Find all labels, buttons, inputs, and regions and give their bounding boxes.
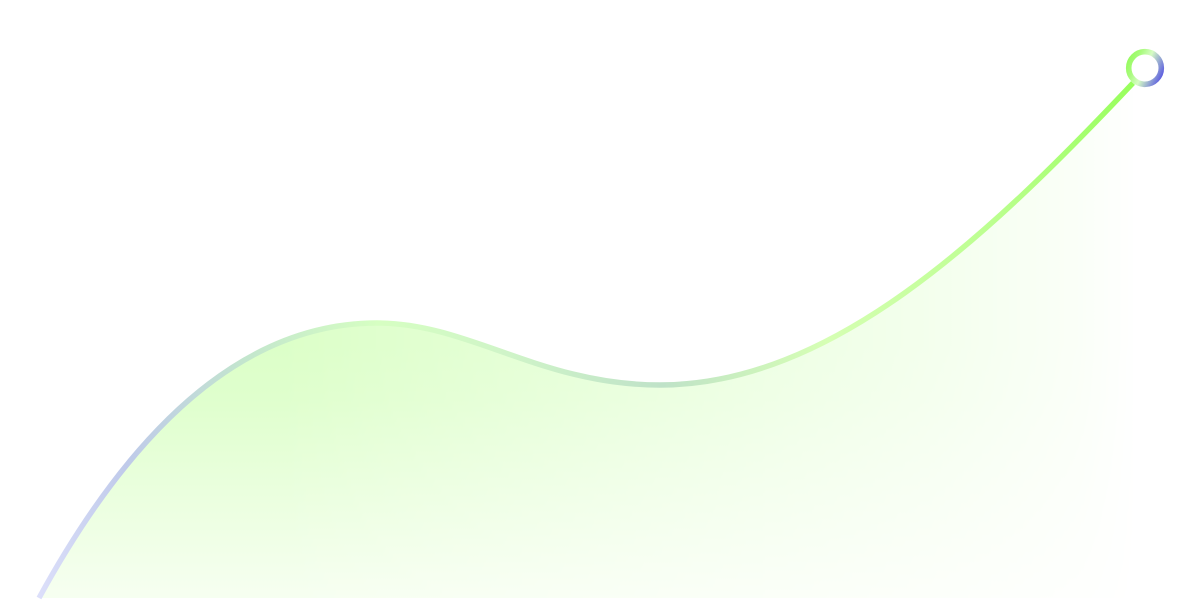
end point ring marker: [1129, 52, 1161, 84]
curve line: [39, 83, 1133, 598]
area fill under curve: [42, 159, 1064, 598]
